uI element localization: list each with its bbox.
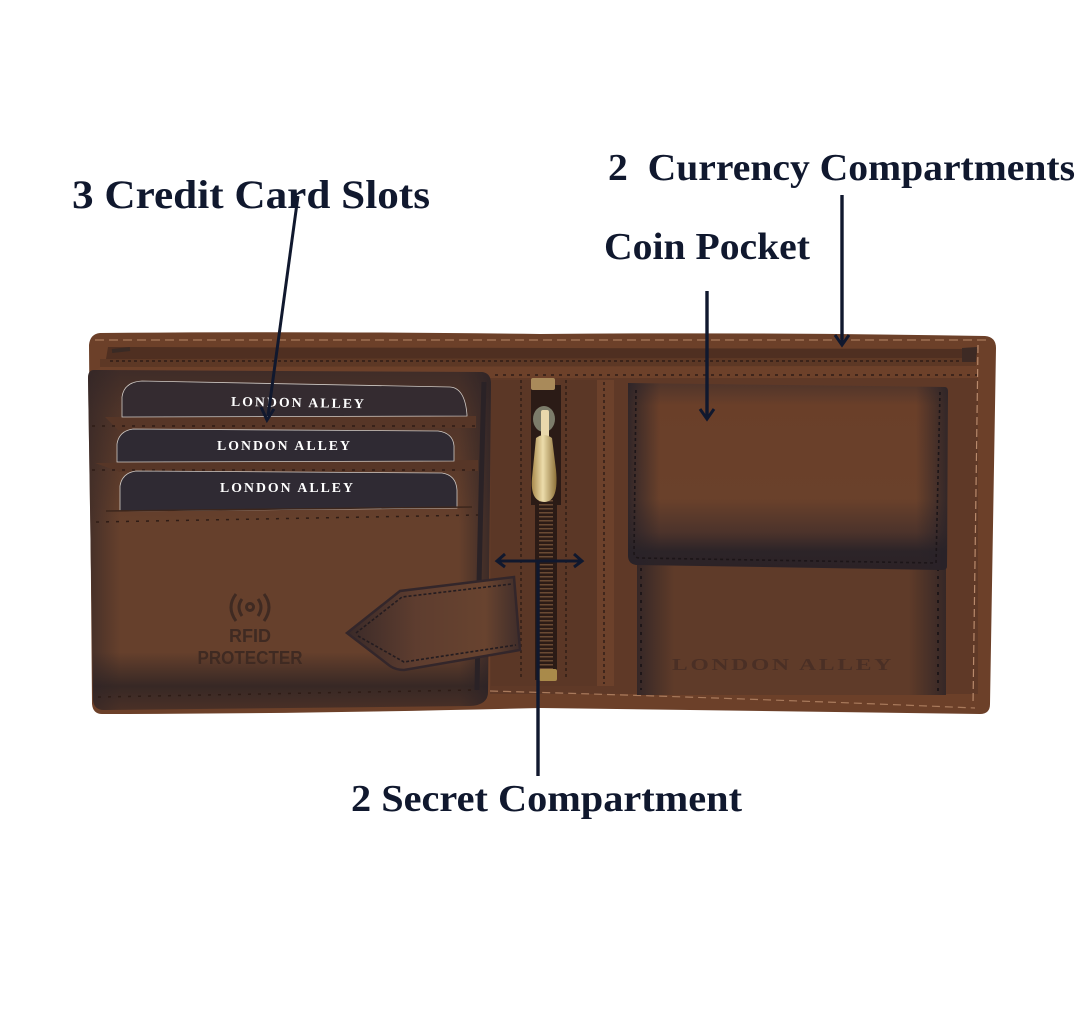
line: secret compartment pointer: [536, 561, 540, 776]
arrow: currency compartments: [835, 195, 849, 345]
zipper compartment: [491, 378, 614, 686]
label: 2 Currency Compartments: 2 Currency Compartments: [608, 147, 1075, 189]
RFID emblem: [198, 594, 302, 668]
credit card 1: [122, 381, 467, 417]
credit card 2: LONDON ALLEY: [217, 438, 352, 453]
zip stops: [531, 378, 555, 390]
front pocket edge: [106, 507, 472, 511]
credit card 3: LONDON ALLEY: [220, 480, 355, 495]
left card panel: [88, 370, 491, 710]
label: 3 Credit Card Slots: 3 Credit Card Slots: [72, 172, 430, 217]
label: Coin Pocket: Coin Pocket: [604, 226, 810, 268]
credit card 2: [117, 429, 454, 462]
arrow: coin pocket: [700, 291, 714, 419]
credit card 3: [120, 471, 457, 511]
wallet photograph: [88, 332, 996, 714]
wallet outer leather body: [89, 332, 996, 714]
slot stitching: [92, 426, 478, 697]
RFID emblem: PROTECTER: [198, 648, 302, 668]
lower coin pouch panel: [637, 562, 946, 695]
clasp tab: [347, 577, 520, 670]
bottom stitching: [490, 691, 975, 708]
RFID emblem: RFID: [229, 626, 271, 646]
label: 2 Secret Compartment: 2 Secret Compartment: [351, 778, 742, 820]
credit card 1: LONDON ALLEY: [231, 394, 366, 411]
panel right edge stitching: [477, 382, 484, 690]
embossed brand: LONDON ALLEY: [672, 655, 894, 674]
card slot leather strips: [105, 416, 476, 430]
inner centre lining: [490, 378, 978, 694]
arrow: credit card slots: [261, 196, 298, 420]
right side stitching: [973, 345, 978, 705]
coin pocket flap: [628, 383, 948, 570]
top currency compartment bands: [90, 340, 990, 380]
double arrow: secret compartment width: [497, 554, 582, 567]
zipper teeth: [531, 385, 561, 505]
zipper pull: [532, 406, 557, 502]
